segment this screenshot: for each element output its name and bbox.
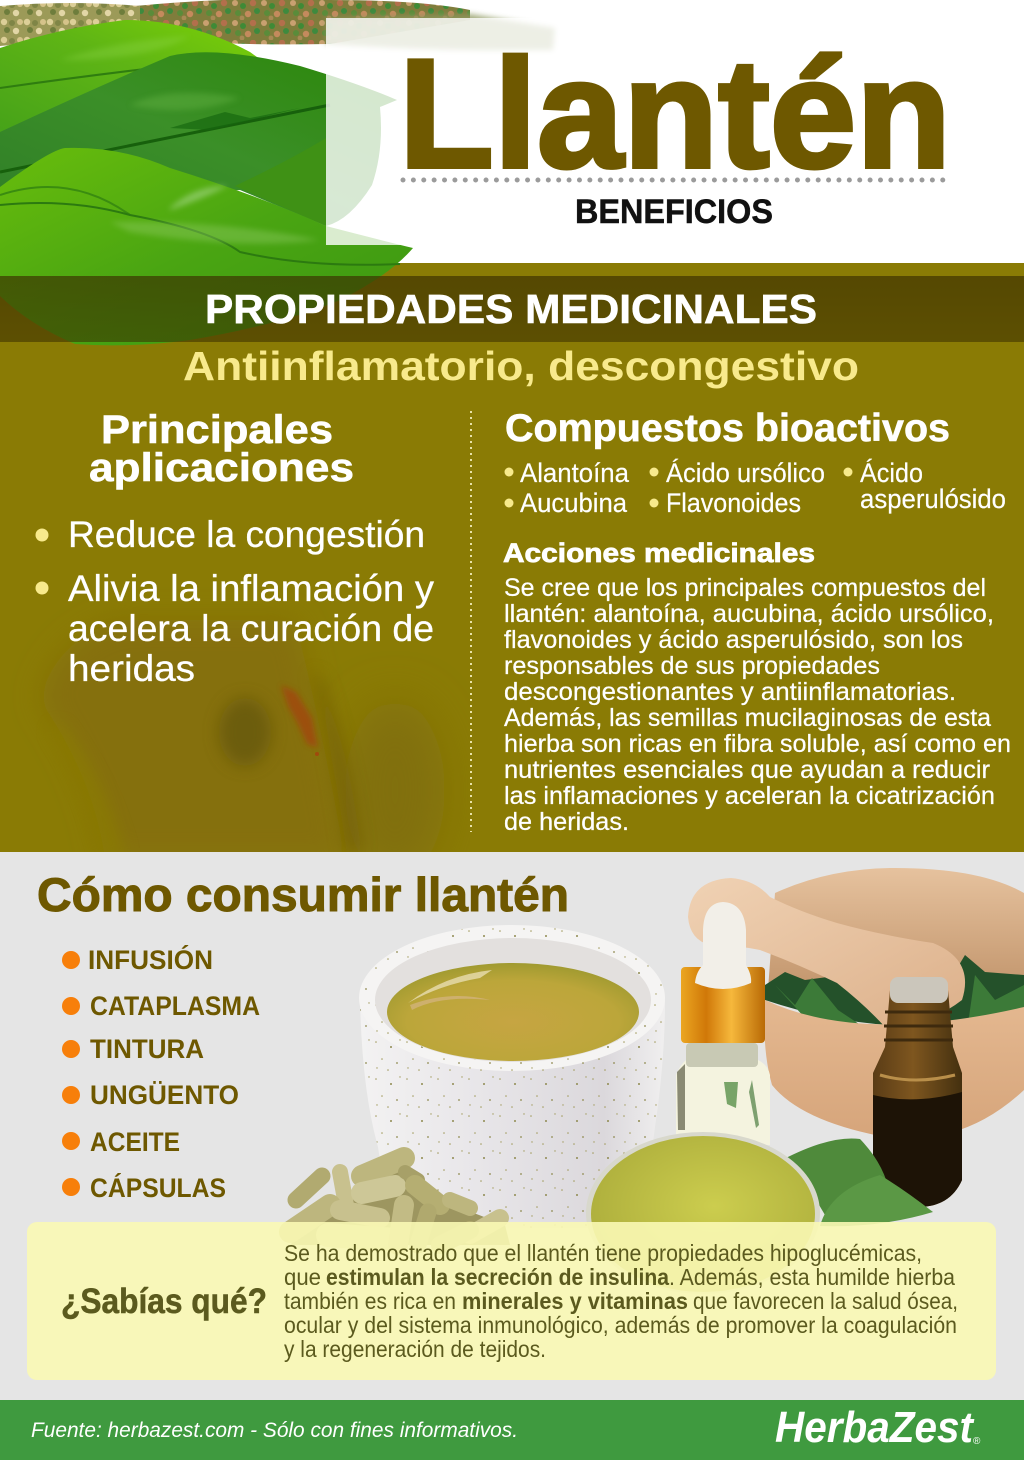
list of consumption forms: INFUSIÓN [88, 944, 213, 975]
compound list: Aucubina [520, 488, 628, 518]
footer logo: HerbaZest: ® [973, 1436, 981, 1447]
callout paragraph: estimulan la secreción de insulina [326, 1264, 669, 1290]
photo: green leaves beside balm [782, 1138, 933, 1226]
callout paragraph: y la regeneración de tejidos. [284, 1336, 546, 1362]
list of consumption forms: ACEITE [90, 1127, 180, 1157]
pestle [688, 878, 965, 1027]
dark band behind section heading [0, 276, 1024, 342]
heading: how to consume: Cómo consumir llantén [37, 868, 569, 921]
callout heading: ¿Sabías qué? [61, 1282, 267, 1321]
photo: white speckled cup of tea [359, 925, 665, 1228]
mortar front wall [764, 1000, 1024, 1136]
callout: did you know [27, 1222, 996, 1380]
heading: principales aplicaciones: aplicaciones [89, 446, 354, 490]
paragraph: medicinal actions: las inflamaciones y aceleran la cicatrización [504, 782, 995, 810]
list of consumption forms [62, 944, 260, 1203]
cup rim [359, 925, 665, 1071]
paragraph: medicinal actions: nutrientes esenciales que ayudan a reducir [504, 756, 990, 784]
paragraph: medicinal actions: descongestionantes y antiinflamatorias. [504, 678, 956, 706]
list of consumption forms: TINTURA [90, 1034, 204, 1064]
subtitle: BENEFICIOS [575, 193, 773, 231]
dotted divider under title [403, 178, 943, 182]
white header background [0, 0, 1024, 263]
green plantain leaves [0, 20, 413, 345]
photo: herbal capsules [290, 1158, 510, 1245]
paragraph: medicinal actions: flavonoides y ácido asperulósido, son los [504, 626, 963, 654]
footer source: Fuente: herbazest.com - Sólo con fines informativos. [31, 1419, 518, 1442]
wounded arm photo, tinted [53, 628, 432, 852]
list of consumption forms: UNGÜENTO [90, 1080, 239, 1110]
photo: amber bottle [873, 977, 962, 1207]
property summary: Antiinflamatorio, descongestivo [183, 343, 859, 389]
list of consumption forms: CATAPLASMA [90, 991, 260, 1021]
tea [387, 963, 639, 1061]
left column: main applications [36, 408, 435, 689]
right column: bioactive compounds [503, 407, 1011, 836]
callout paragraph: Se ha demostrado que el llantén tiene propiedades hipoglucémicas, [284, 1240, 922, 1266]
compound list [504, 458, 1006, 518]
mortar interior [768, 868, 1024, 1021]
heading: medicinal properties: PROPIEDADES MEDICINALES [205, 286, 817, 332]
leaf: middle dark [0, 52, 397, 226]
paragraph: medicinal actions: Además, las semillas mucilaginosas de esta [504, 704, 991, 732]
title: Llantén [399, 27, 951, 200]
bullet list of applications: Reduce la congestión [68, 514, 425, 555]
callout paragraph: que [284, 1264, 321, 1290]
heading: compuestos bioactivos: Compuestos bioactivos [505, 407, 950, 450]
paragraph: medicinal actions: responsables de sus propiedades [504, 652, 880, 680]
herbs in mortar [765, 955, 1024, 1026]
callout paragraph: también es rica en [284, 1288, 456, 1314]
photo: balm tin [586, 1132, 820, 1294]
bullet list of applications [36, 514, 435, 689]
paragraph: medicinal actions: Se cree que los principales compuestos del [504, 574, 986, 602]
callout paragraph [284, 1240, 958, 1362]
translucent white title panel [326, 18, 1024, 245]
compound list: asperulósido [860, 484, 1006, 514]
compound list: Ácido ursólico [666, 458, 825, 488]
compound list: Alantoína [520, 458, 630, 488]
photo: dropper bottle [676, 902, 770, 1145]
callout paragraph: que favorecen la salud ósea, [693, 1288, 958, 1314]
footer logo: HerbaZest: HerbaZest [775, 1403, 975, 1452]
list of consumption forms: CÁPSULAS [90, 1172, 226, 1203]
photo: wooden mortar with herbs [688, 868, 1024, 1136]
heading: acciones medicinales: Acciones medicinales [503, 538, 815, 568]
callout paragraph: . Además, esta humilde hierba [669, 1264, 955, 1290]
compound list: Flavonoides [666, 488, 801, 518]
heading: principales aplicaciones [89, 408, 354, 490]
bullet list of applications: heridas [68, 648, 195, 689]
paragraph: medicinal actions: hierba son ricas en fibra soluble, así como en [504, 730, 1011, 758]
compound list: Ácido [860, 458, 923, 488]
heading: principales aplicaciones: Principales [101, 408, 333, 452]
bullet list of applications: acelera la curación de [68, 608, 434, 649]
callout background [27, 1222, 996, 1380]
olive content panel background [0, 263, 1024, 852]
callout paragraph: minerales y vitaminas [462, 1288, 688, 1314]
paragraph: medicinal actions: de heridas. [504, 808, 629, 836]
paragraph: medicinal actions [504, 574, 1011, 836]
grey consumption section background [0, 852, 1024, 1400]
callout paragraph: ocular y del sistema inmunológico, además de promover la coagulación [284, 1312, 957, 1338]
seed spike photo [0, 0, 555, 50]
leaf: front bright [0, 148, 413, 345]
bullet list of applications: Alivia la inflamación y [68, 568, 435, 609]
footer band [0, 1400, 1024, 1460]
leaf: back light [0, 20, 330, 170]
paragraph: medicinal actions: llantén: alantoína, aucubina, ácido ursólico, [504, 600, 994, 628]
